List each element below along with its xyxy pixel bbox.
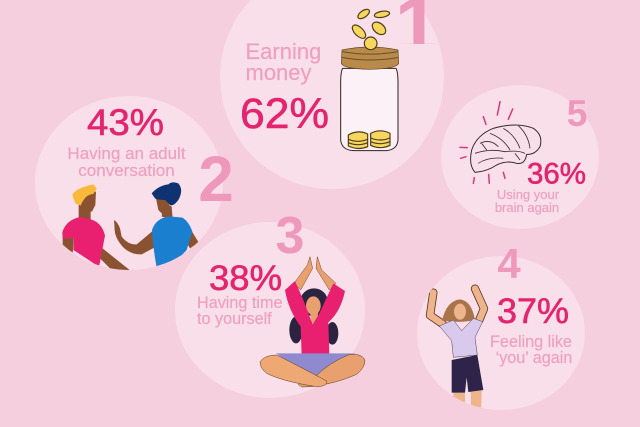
panel: feeling like you <box>417 249 585 410</box>
label: feeling like you again: Feeling like <box>490 333 572 351</box>
illustration: two people talking <box>62 182 199 273</box>
rank number 4: 4 <box>497 240 521 287</box>
stat: 43%: 43% <box>87 102 164 143</box>
label: having an adult conversation: Having an adult <box>67 144 186 163</box>
icon: brain <box>460 102 541 183</box>
panel: earning money <box>220 0 444 189</box>
rank number 2: 2 <box>198 143 234 215</box>
illustration: woman raising arms <box>430 289 484 427</box>
stat: 36%: 36% <box>527 158 586 190</box>
rank number 3: 3 <box>276 207 304 265</box>
label: feeling like you again: ‘you’ again <box>496 349 572 367</box>
label: using your brain again: brain again <box>495 200 559 215</box>
label: earning money: money <box>246 60 312 85</box>
stat: 38%: 38% <box>209 259 282 298</box>
label: having time to yourself: Having time <box>197 294 282 312</box>
stat: 37%: 37% <box>497 292 569 331</box>
label: using your brain again: Using your <box>497 187 560 202</box>
illustration: meditating woman <box>260 257 365 387</box>
label: having an adult conversation: conversation <box>78 161 175 180</box>
label: having time to yourself: to yourself <box>197 310 272 328</box>
panel: time to yourself <box>175 207 365 398</box>
label: earning money: Earning <box>246 39 321 64</box>
icon: jar with coins <box>341 7 399 151</box>
panel: adult conversation <box>35 96 234 273</box>
panel: using your brain <box>441 85 599 229</box>
rank number 5: 5 <box>567 93 587 134</box>
stat: 62%: 62% <box>240 90 329 138</box>
